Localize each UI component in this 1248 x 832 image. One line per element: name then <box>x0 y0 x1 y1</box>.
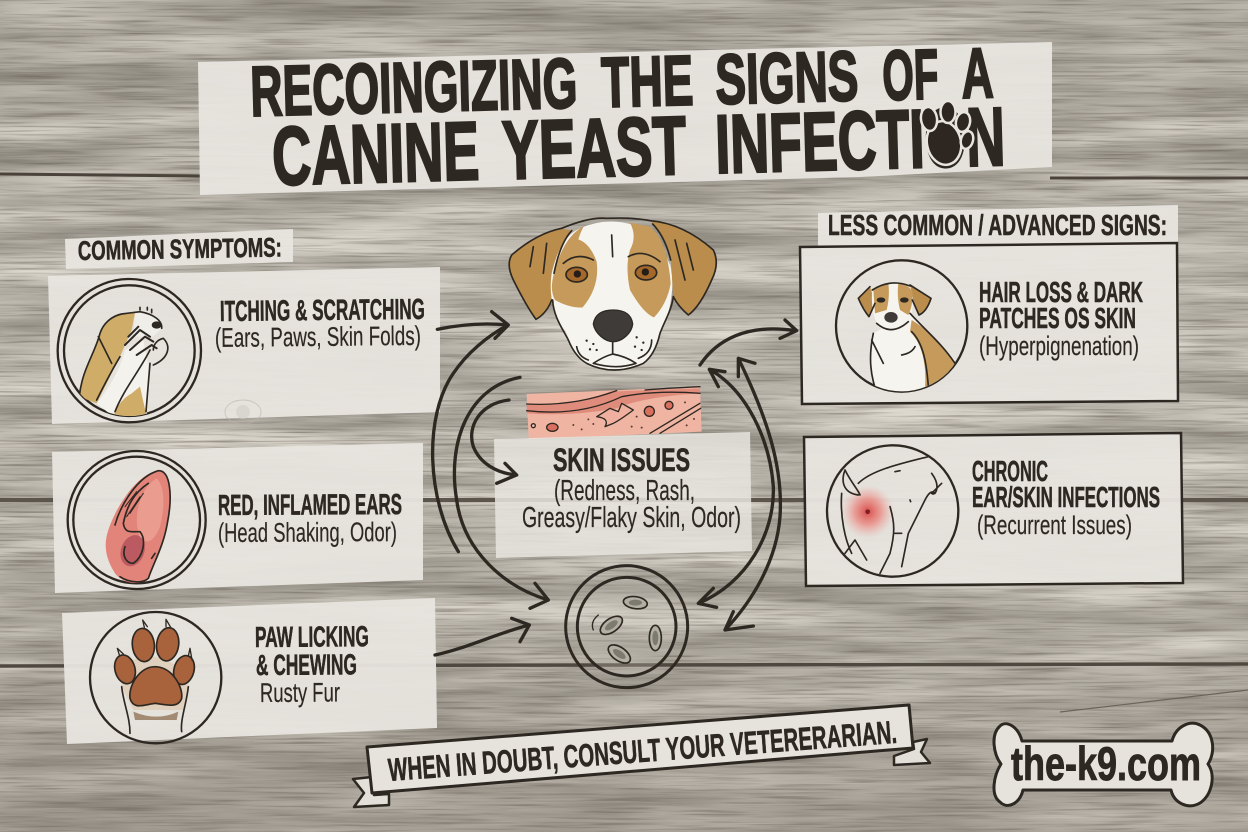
symptom: itching and scratching: (Ears, Paws, Skin Folds) <box>215 321 421 353</box>
title line 1 <box>249 34 994 132</box>
symptom: red inflamed ears <box>52 443 423 593</box>
panel: skin issues: Greasy/Flaky Skin, Odor) <box>522 502 741 534</box>
icon: yeast cells under microscope <box>566 566 688 688</box>
panel: less common advanced signs <box>800 205 1183 586</box>
sign: hair loss and dark patches <box>800 243 1178 404</box>
heading: less common advanced signs <box>818 205 1178 246</box>
symptom: red inflamed ears: (Head Shaking, Odor) <box>218 517 397 548</box>
title line 2: CANINE <box>271 104 480 203</box>
title line 1: RECOINGIZING <box>249 44 578 132</box>
callout ribbon: consult your veterinarian: WHEN IN DOUBT, CONSULT YOUR VETERERARIAN. <box>387 714 898 788</box>
title line 1: SIGNS <box>714 37 859 120</box>
sign: hair loss and dark patches: PATCHES OS SKIN <box>979 303 1136 335</box>
sign: chronic ear and skin infections: CHRONIC <box>972 456 1048 488</box>
title line 2 <box>271 90 1006 203</box>
callout ribbon: consult your veterinarian <box>353 705 930 807</box>
title line 2: INFECTION <box>714 90 1006 191</box>
title line 2: YEAST <box>501 99 687 197</box>
icon: inflamed ear <box>68 451 206 589</box>
panel: skin issues <box>494 432 752 558</box>
symptom: paw licking and chewing <box>62 598 437 744</box>
symptom: red inflamed ears: RED, INFLAMED EARS <box>218 489 402 522</box>
panel: skin issues: (Redness, Rash, <box>554 475 695 507</box>
icon: dog portrait <box>836 260 967 397</box>
arrows: relationship cycle <box>433 312 797 655</box>
title line 1: OF <box>881 36 939 116</box>
symptom: itching and scratching: ITCHING & SCRATCHING <box>220 294 425 328</box>
icon: dog hindquarters with sore <box>827 445 958 577</box>
icon: dog head <box>509 218 716 370</box>
icon: paw <box>90 612 221 743</box>
panel: skin issues: SKIN ISSUES <box>553 442 690 478</box>
sign: hair loss and dark patches: (Hyperpignenation) <box>979 331 1139 361</box>
title banner <box>198 34 1052 203</box>
sign: chronic ear and skin infections <box>804 433 1183 586</box>
symptom: paw licking and chewing: & CHEWING <box>256 649 357 682</box>
logo: bone the-k9.com <box>994 723 1213 806</box>
heading: common symptoms: COMMON SYMPTOMS: <box>78 232 282 266</box>
title line 1: THE <box>600 42 694 123</box>
panel: common symptoms <box>48 229 440 744</box>
icon: dog scratching <box>58 279 201 422</box>
heading: common symptoms <box>65 229 293 269</box>
symptom: itching and scratching <box>48 267 440 424</box>
icon: paw in title <box>919 101 975 168</box>
central diagram <box>433 218 797 688</box>
title line 1: A <box>960 34 994 114</box>
sign: chronic ear and skin infections: (Recurrent Issues) <box>977 510 1132 540</box>
illustration: skin cross-section <box>527 387 702 439</box>
symptom: paw licking and chewing: Rusty Fur <box>260 677 340 708</box>
symptom: paw licking and chewing: PAW LICKING <box>255 621 369 654</box>
